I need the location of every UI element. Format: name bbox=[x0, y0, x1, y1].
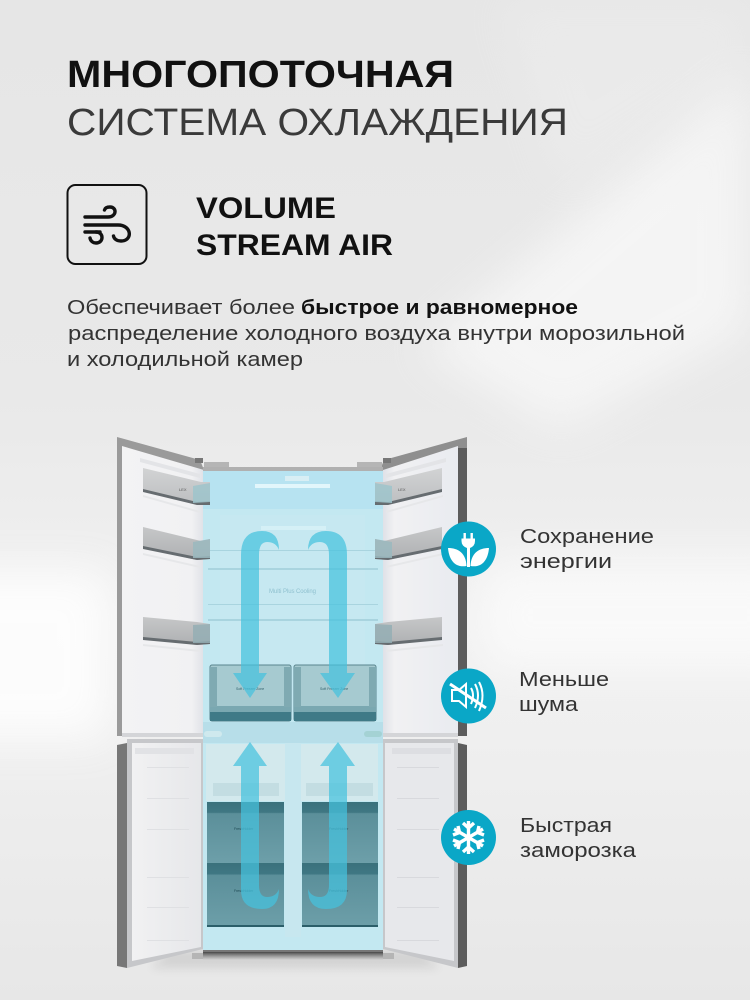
soft freezer bins: Soft Freezer Zone bbox=[320, 687, 348, 691]
badge: less noise bbox=[441, 668, 496, 724]
title bbox=[67, 54, 568, 144]
floor shadow bbox=[150, 950, 440, 968]
cabinet interior: Multi Plus Cooling bbox=[269, 589, 316, 595]
under-fridge shadow bbox=[203, 952, 383, 960]
heading: Volume Stream Air bbox=[196, 192, 393, 262]
label: fast freezing: Быстрая bbox=[520, 815, 612, 837]
soft freezer bins bbox=[210, 665, 376, 721]
label: fast freezing bbox=[520, 815, 637, 862]
soft freezer bins: Soft Freezer Zone bbox=[236, 687, 264, 691]
description text: быстрое и равномерное bbox=[301, 297, 578, 319]
cabinet interior bbox=[203, 467, 383, 951]
refrigerator bbox=[117, 437, 467, 968]
door shelves left bbox=[143, 468, 210, 645]
door shelves left: LEX bbox=[179, 487, 187, 492]
description text: и холодильной камер bbox=[67, 349, 303, 371]
heading: Volume Stream Air: STREAM AIR bbox=[196, 229, 393, 262]
label: energy saving bbox=[520, 526, 654, 573]
upper left door bbox=[117, 437, 204, 737]
upper right door bbox=[380, 437, 467, 737]
freezer compartments bbox=[206, 743, 378, 937]
label: less noise: шума bbox=[519, 694, 579, 716]
badge: energy saving bbox=[441, 522, 496, 576]
door shelves right: LEX bbox=[398, 487, 406, 492]
label: energy saving: энергии bbox=[520, 551, 612, 573]
hinges and feet bbox=[192, 458, 394, 959]
divider band bbox=[203, 722, 383, 743]
title: СИСТЕМА ОХЛАЖДЕНИЯ bbox=[67, 102, 568, 144]
freezer compartments: FreshHolder bbox=[234, 889, 254, 893]
arrow: up left bbox=[233, 742, 279, 909]
title: МНОГОПОТОЧНАЯ bbox=[67, 54, 454, 96]
freezer compartments: FreshHolder bbox=[329, 827, 349, 831]
arrow: up right bbox=[308, 742, 355, 909]
description text: Обеспечивает более bbox=[67, 297, 295, 319]
label: less noise: Меньше bbox=[519, 669, 609, 691]
freezer compartments: FreshHolder bbox=[329, 889, 349, 893]
description text bbox=[67, 297, 685, 371]
freezer compartments: FreshHolder bbox=[234, 827, 254, 831]
label: energy saving: Сохранение bbox=[520, 526, 654, 548]
badge: fast freezing bbox=[441, 810, 496, 865]
cabinet bottom edge bbox=[203, 950, 383, 952]
label: less noise bbox=[519, 669, 609, 716]
label: fast freezing: заморозка bbox=[520, 840, 637, 862]
description text: распределение холодного воздуха внутри морозильной bbox=[68, 323, 685, 345]
heading: Volume Stream Air: VOLUME bbox=[196, 192, 336, 225]
arrow: down left bbox=[233, 531, 279, 698]
door shelves right bbox=[375, 468, 442, 645]
icon: wind in rounded square bbox=[68, 185, 146, 264]
lower right door bbox=[383, 739, 467, 968]
lower left door bbox=[117, 739, 203, 968]
airflow arrows bbox=[233, 531, 355, 909]
arrow: down right bbox=[308, 531, 355, 698]
